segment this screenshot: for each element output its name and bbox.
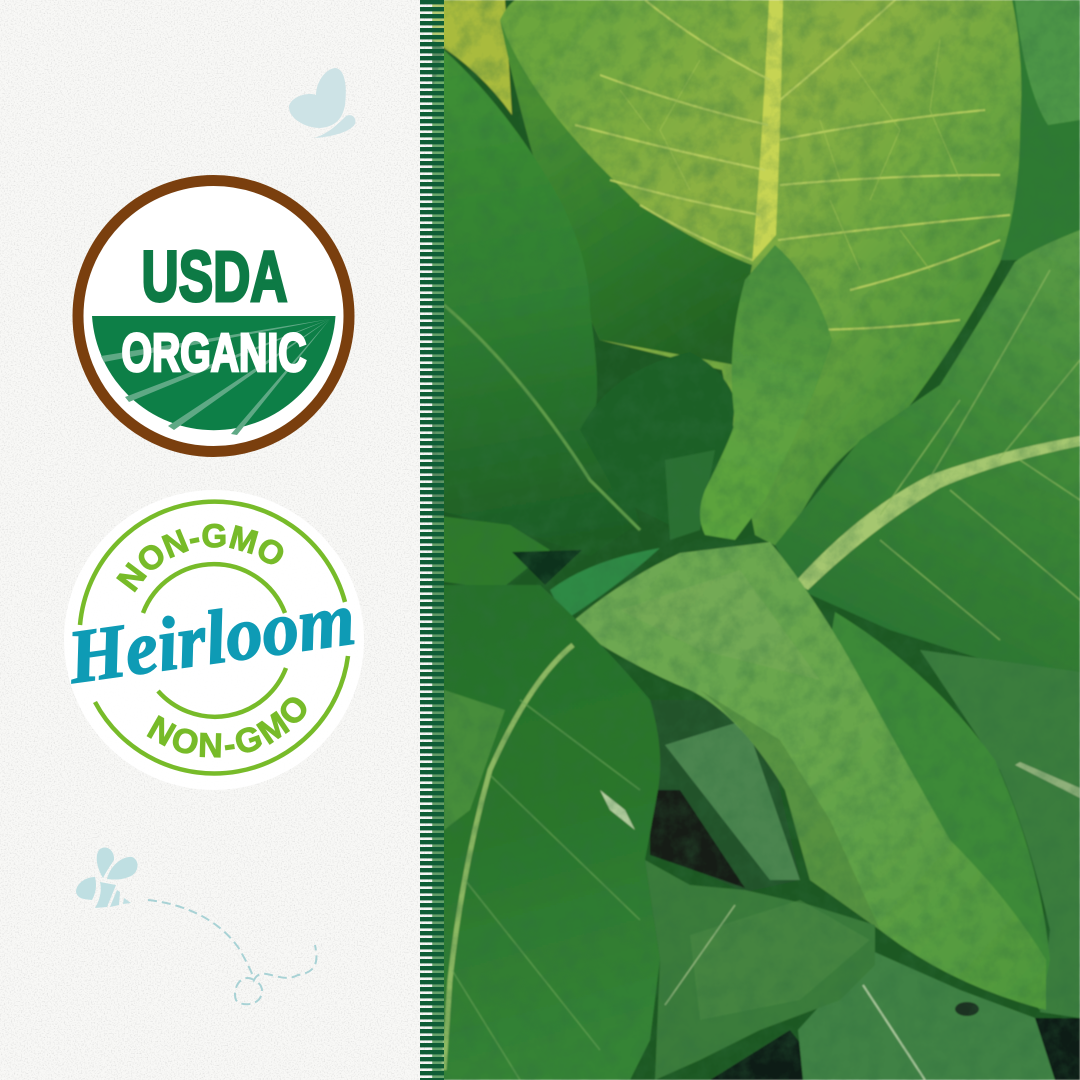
soil: bottom [710,1030,804,1080]
dark soil gap [655,702,744,888]
leaf: lower left [432,585,660,1080]
leaf: right large [775,230,1080,672]
icon: butterfly [289,68,355,138]
fabric background [0,0,432,1080]
leaf: small centre upright [700,245,832,540]
green field [92,316,336,430]
leaf: left tall [432,50,640,556]
field rays [101,319,330,435]
leaf: small mid floret [550,548,660,620]
leaf: top large lit leaf [500,0,1021,548]
rings [80,502,348,774]
top arc text: NON-GMO [116,524,284,592]
leaf: behind centre [820,612,1050,1010]
white halo [64,490,364,790]
leaf mottling texture [432,0,1080,1080]
ORGANIC text: ORGANIC [122,323,306,383]
leaf: centre large pale [552,542,1046,1010]
Heirloom script: Heirloom [62,577,360,700]
leaf: top right background [1000,0,1080,260]
leaf: lower middle [645,860,875,1080]
leaf: right lower background [920,650,1080,1018]
photo: romaine lettuce leaves [432,0,1080,1080]
icon: bee with dashed flight path [76,847,316,1004]
leaf: bottom right [798,950,1055,1080]
badge: Heirloom Non-GMO [62,490,364,790]
leaf: top left yellow [432,0,512,115]
USDA text: USDA [142,238,288,317]
ring [78,180,349,452]
leaves: dark inner cluster [432,352,735,590]
bottom arc text: NON-GMO [146,697,306,758]
badge: USDA Organic [78,180,349,452]
striped border [420,0,444,1080]
